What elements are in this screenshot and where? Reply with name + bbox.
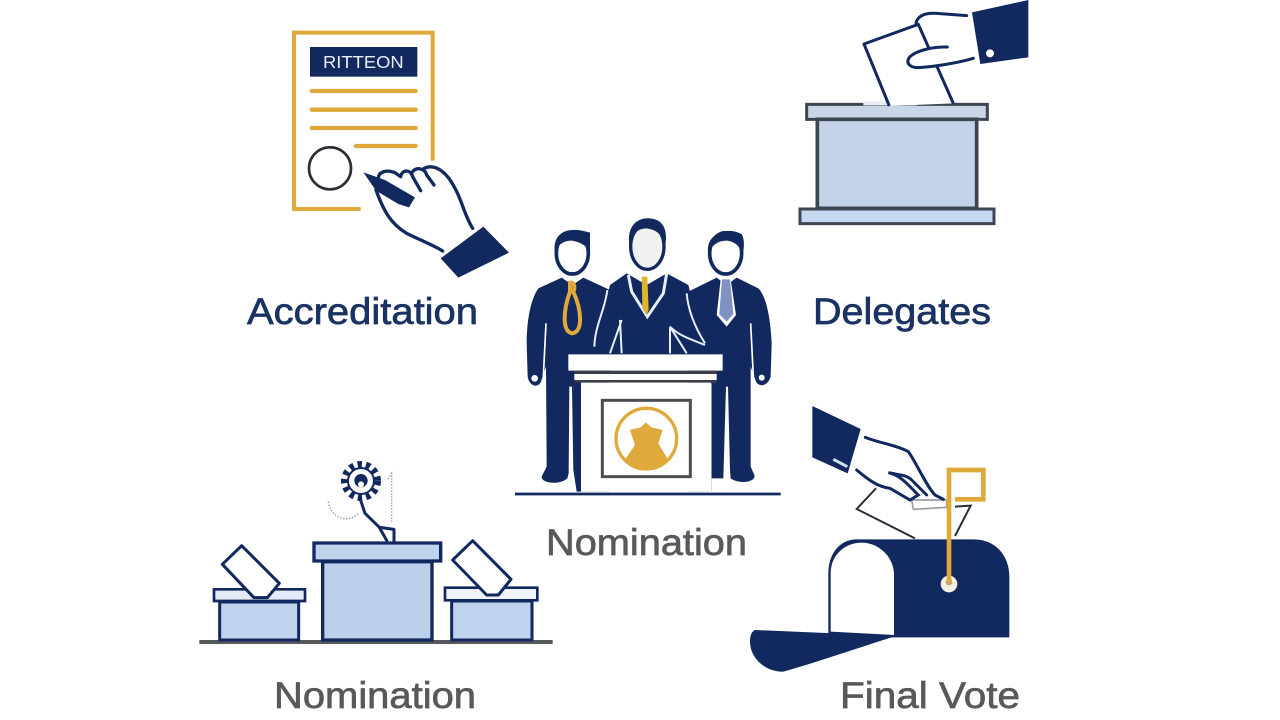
- icon: delegates ballot box and hand: [800, 0, 1028, 224]
- icon: final vote mailbox and hand: [750, 406, 1009, 672]
- icon: gear on stem: [328, 464, 394, 542]
- icon: three candidates at podium: [515, 218, 781, 494]
- figure: center candidate: [593, 218, 707, 357]
- figure: left candidate: [527, 230, 610, 492]
- heading: Final Vote: Final Vote: [840, 675, 1020, 716]
- heading: Delegates: Delegates: [813, 291, 991, 332]
- icon: accreditation document and hand: [294, 33, 509, 278]
- podium: [568, 354, 723, 492]
- heading: Nomination bottom left: Nomination: [274, 675, 476, 716]
- right ballot box: [445, 541, 537, 640]
- left ballot box: [214, 546, 305, 640]
- icon: nomination ballot boxes: [199, 464, 553, 642]
- figure: right candidate: [688, 231, 772, 492]
- heading: Accreditation: Accreditation: [247, 291, 478, 332]
- heading: Nomination center: Nomination: [546, 522, 747, 563]
- document banner text: RITTEON: [323, 52, 404, 72]
- center ballot box: [314, 543, 441, 640]
